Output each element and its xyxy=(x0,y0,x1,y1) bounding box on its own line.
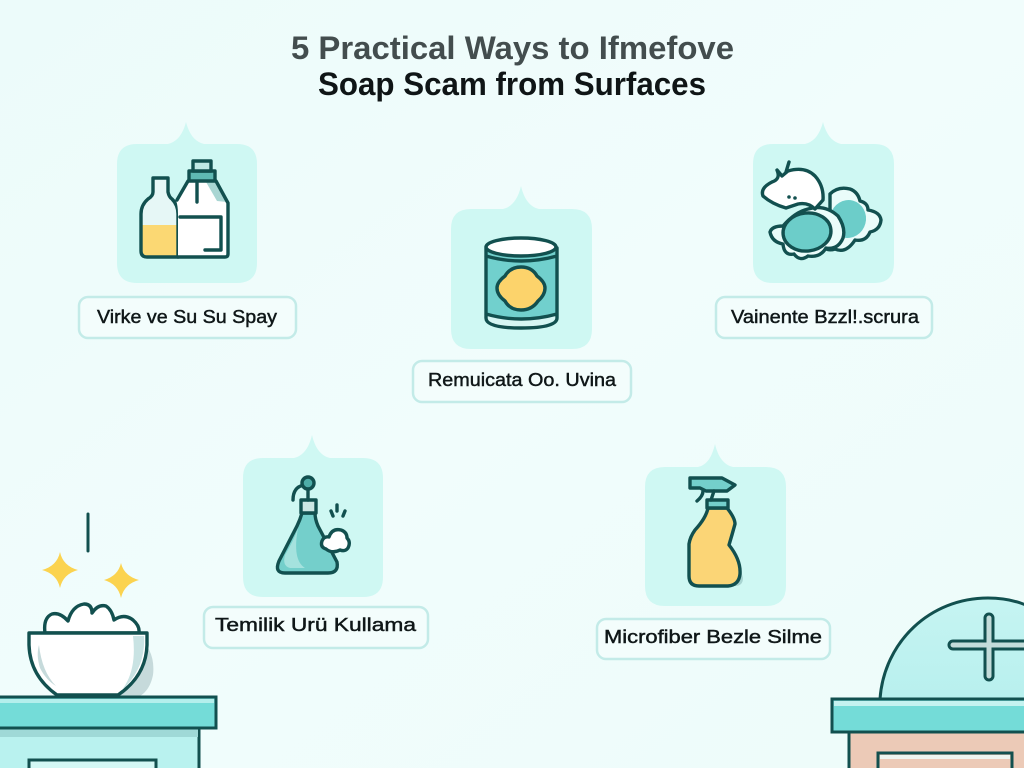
icon: sponges xyxy=(762,162,881,259)
countertop xyxy=(0,697,216,728)
card background xyxy=(243,435,383,597)
panel: microfiber sponge xyxy=(716,122,932,338)
label: Remuicata Oo. Uvina xyxy=(428,369,617,390)
drawer xyxy=(878,753,1012,768)
drawer xyxy=(29,760,156,768)
label xyxy=(716,297,932,338)
title xyxy=(291,30,734,102)
panel: vinegar and water spray xyxy=(79,122,296,338)
label: Virke ve Su Su Spay xyxy=(97,306,278,327)
panel: cleaning product xyxy=(204,435,428,648)
label xyxy=(79,297,296,338)
label xyxy=(204,607,428,648)
card background xyxy=(451,186,592,349)
soap foam xyxy=(45,604,139,633)
sparkle line xyxy=(86,514,90,551)
label xyxy=(413,361,631,402)
dome xyxy=(880,598,1024,699)
illustration: right counter with dome xyxy=(832,598,1024,768)
bowl xyxy=(29,633,147,695)
title: 5 Practical Ways to Ifmefove xyxy=(291,30,734,66)
icon: bottles xyxy=(141,161,228,257)
icon: can xyxy=(486,238,557,328)
cabinet xyxy=(0,728,199,768)
label: Microfiber Bezle Silme xyxy=(604,626,822,647)
panel: lemon can xyxy=(413,186,631,402)
icon: spray bottle xyxy=(689,478,743,586)
label: Vainente Bzzl!.scrura xyxy=(731,306,920,327)
cabinet xyxy=(849,732,1024,768)
card background xyxy=(645,444,786,606)
label: Temilik Urü Kullama xyxy=(215,614,417,635)
bowl shadow xyxy=(115,634,153,696)
cross handle xyxy=(953,618,1024,676)
card background xyxy=(117,122,257,283)
label xyxy=(597,619,830,659)
icon: soap pump bottle xyxy=(277,477,349,573)
icon: sparkles xyxy=(42,552,139,598)
illustration: left counter with bowl xyxy=(0,514,216,768)
card background xyxy=(753,122,894,283)
panel: microfiber cloth wipe xyxy=(597,444,830,659)
countertop xyxy=(832,699,1024,732)
title: Soap Scam from Surfaces xyxy=(318,66,706,102)
